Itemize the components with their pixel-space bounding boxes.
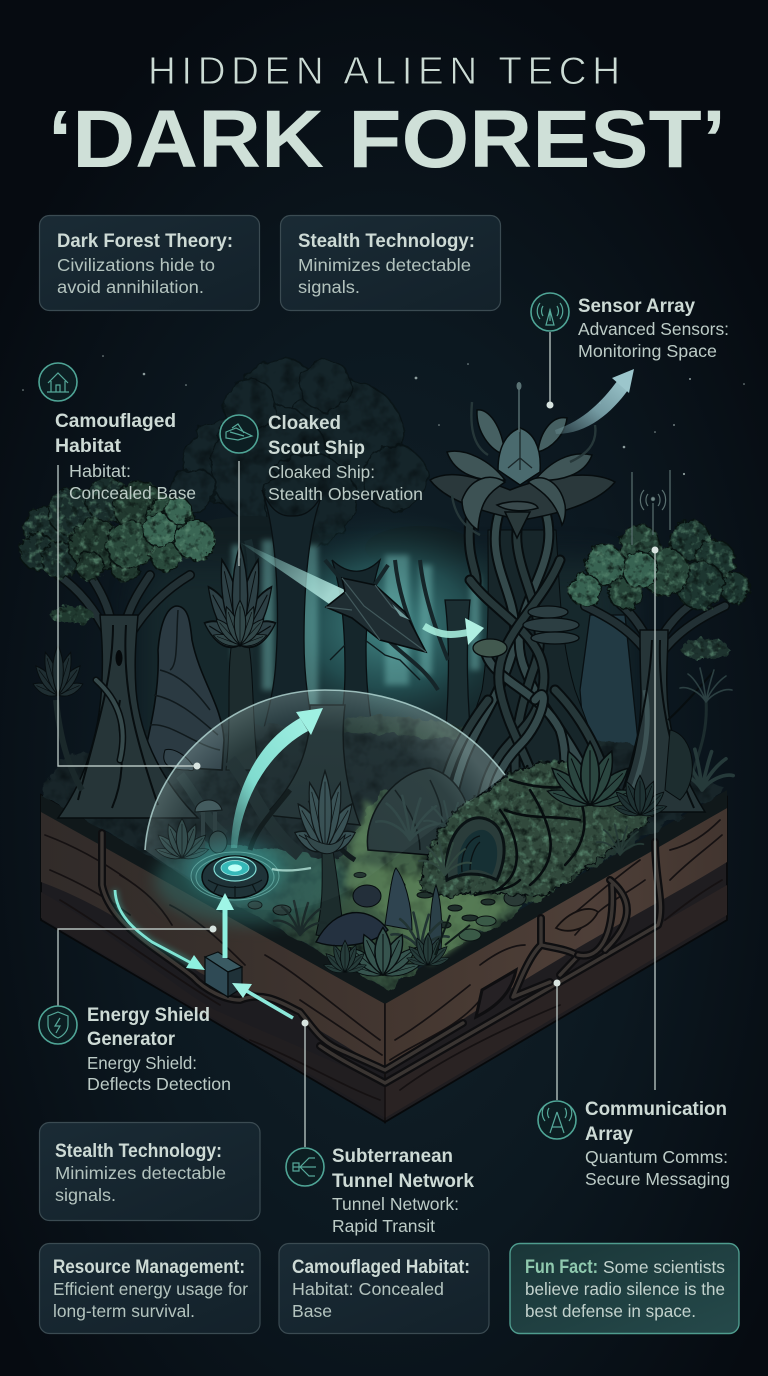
- callout: energy shield generator: Generator: [87, 1029, 176, 1050]
- callout: communication array: Quantum Comms:: [585, 1147, 728, 1167]
- icon: house: [39, 363, 77, 401]
- right tree branches: [585, 604, 725, 650]
- beacon: [187, 840, 311, 900]
- callout: camouflaged habitat: Concealed Base: [69, 483, 196, 503]
- callout: subterranean tunnel network: Subterranean: [332, 1146, 453, 1167]
- callout: cloaked scout ship: Scout Ship: [268, 438, 365, 459]
- small side canopy: [50, 606, 94, 624]
- callout: cloaked scout ship: Cloaked: [268, 413, 341, 434]
- dome launch arrow: [231, 708, 323, 848]
- panel: camouflaged habitat: Habitat: Concealed: [292, 1279, 444, 1299]
- callout: sensor array: Sensor Array: [578, 296, 695, 317]
- sensor tower and vine column: [430, 382, 618, 815]
- panel: stealth technology top: signals.: [298, 277, 360, 297]
- panel: resource management: Resource Management:: [53, 1257, 245, 1278]
- panel: fun fact: Some scientists: [603, 1257, 725, 1277]
- callout: subterranean tunnel network: Tunnel Network:: [332, 1194, 459, 1214]
- dome interior forest: [154, 705, 476, 862]
- energy up arrow: [216, 893, 234, 958]
- forest floor dark mass: [41, 720, 727, 860]
- ship exit arrow: [424, 618, 484, 645]
- panel: stealth technology lower: Stealth Technology:: [55, 1141, 222, 1162]
- soil right face: [385, 797, 727, 1122]
- panel: stealth technology top: Minimizes detectable: [298, 255, 471, 275]
- panel: stealth technology lower: [40, 1122, 260, 1220]
- ground surface: [41, 715, 727, 988]
- mound-side foliage: [419, 742, 668, 875]
- energy dome: [145, 690, 505, 910]
- panel: stealth technology lower: signals.: [55, 1185, 116, 1205]
- callout: camouflaged habitat: Habitat: [55, 436, 122, 457]
- ship beam: [241, 543, 345, 608]
- glowing forest clearing: [232, 510, 535, 740]
- back canopy: [173, 359, 475, 570]
- communication antennas: [632, 470, 670, 545]
- standing rock: [142, 606, 224, 771]
- callout: energy shield generator: [39, 926, 231, 1094]
- moss mound with tunnel entrance: [420, 762, 655, 898]
- callout: camouflaged habitat: [39, 363, 200, 770]
- panel: fun fact: Fun Fact:: [525, 1257, 598, 1278]
- cloaked ship: [326, 578, 426, 652]
- icon: shield: [39, 1006, 77, 1044]
- callout: cloaked scout ship: [220, 413, 423, 566]
- panel: dark forest theory: Dark Forest Theory:: [57, 231, 233, 252]
- dark band below ground edge: [41, 790, 727, 1004]
- tunnel arrow left: [115, 890, 205, 970]
- left side plant: [32, 645, 84, 790]
- callout: energy shield generator: Energy Shield: [87, 1005, 210, 1026]
- panel: dark forest theory: Civilizations hide to: [57, 255, 215, 275]
- panel: fun fact: best defense in space.: [525, 1301, 696, 1321]
- callout: cloaked scout ship: Stealth Observation: [268, 484, 423, 504]
- right tree canopy: [569, 520, 750, 609]
- sensor signal arrow: [555, 369, 634, 434]
- left tree canopy: [20, 478, 215, 581]
- callout: subterranean tunnel network: Rapid Transit: [332, 1216, 435, 1236]
- callout: communication array: Communication: [585, 1099, 727, 1120]
- capsule pod: [498, 428, 540, 485]
- back tree trunks: [248, 490, 640, 775]
- panel: camouflaged habitat: [279, 1244, 489, 1334]
- right tree trunk and roots: [612, 630, 705, 812]
- callout: energy shield generator: Deflects Detection: [87, 1074, 231, 1094]
- lower strata tint: [385, 885, 727, 1118]
- icon: network: [286, 1148, 324, 1186]
- panel: dark forest theory: avoid annihilation.: [57, 277, 204, 297]
- tower antenna: [516, 382, 522, 432]
- tower root mass: [435, 530, 618, 815]
- panel: resource management: [40, 1244, 260, 1334]
- title: [48, 50, 726, 185]
- soil pockets: [556, 909, 598, 931]
- icon: ship: [220, 415, 258, 453]
- panel: stealth technology top: [280, 216, 500, 310]
- starfield: [22, 355, 745, 475]
- icon: sensor array: [531, 293, 569, 331]
- tunnel arrow right: [232, 983, 293, 1018]
- callout: communication array: Array: [585, 1124, 633, 1145]
- left tree branches: [58, 575, 190, 635]
- callout: subterranean tunnel network: Tunnel Network: [332, 1171, 474, 1192]
- panel: camouflaged habitat: Base: [292, 1301, 332, 1321]
- bracket fungi on the column: [473, 606, 579, 657]
- callout: communication array: Secure Messaging: [585, 1169, 730, 1189]
- panel: fun fact: [510, 1244, 739, 1334]
- panel: dark forest theory: [40, 216, 260, 310]
- tunnel network: [102, 833, 660, 1083]
- callout: camouflaged habitat: Camouflaged: [55, 411, 176, 432]
- panel: stealth technology lower: Minimizes detectable: [55, 1163, 226, 1183]
- dim back forest wash: [140, 560, 630, 790]
- callout: sensor array: Advanced Sensors:: [578, 319, 729, 339]
- spiky plant: [203, 545, 277, 770]
- callout: subterranean tunnel network: [286, 1020, 474, 1236]
- panel: resource management: long-term survival.: [53, 1301, 195, 1321]
- palm and side plants: [665, 668, 733, 800]
- panel: stealth technology top: Stealth Technology:: [298, 231, 475, 252]
- panel: camouflaged habitat: Camouflaged Habitat:: [292, 1257, 470, 1278]
- forest scene: [20, 359, 750, 1122]
- shield generator: [205, 952, 242, 997]
- small right canopy: [681, 638, 729, 660]
- title: ‘DARK FOREST’: [48, 94, 726, 185]
- callout: energy shield generator: Energy Shield:: [87, 1053, 197, 1073]
- teal glow on ground near beacon: [155, 835, 345, 925]
- moss stones: [248, 872, 526, 941]
- vine strands: [438, 510, 615, 815]
- callout: sensor array: [531, 293, 729, 408]
- soil strata lines: [45, 820, 722, 1120]
- panel: resource management: Efficient energy usage for: [53, 1279, 248, 1299]
- left tree trunk and roots: [58, 615, 198, 818]
- icon: radio tower: [538, 1101, 576, 1139]
- left tree: [20, 478, 215, 818]
- soil left face: [41, 795, 385, 1122]
- callout: sensor array: Monitoring Space: [578, 341, 717, 361]
- callout: camouflaged habitat: Habitat:: [69, 461, 131, 481]
- vine tendrils around crown: [452, 402, 595, 535]
- soil block: [41, 715, 727, 1122]
- broad leaf crown: [430, 410, 615, 538]
- hanging twigs: [330, 640, 420, 680]
- callout: communication array: [538, 546, 730, 1189]
- central foreground plants: [274, 771, 470, 980]
- callout: cloaked scout ship: Cloaked Ship:: [268, 462, 375, 482]
- right tree: [569, 470, 750, 812]
- moss path: [345, 800, 510, 965]
- panel: fun fact: believe radio silence is the: [525, 1279, 725, 1299]
- title: HIDDEN ALIEN TECH: [148, 50, 620, 93]
